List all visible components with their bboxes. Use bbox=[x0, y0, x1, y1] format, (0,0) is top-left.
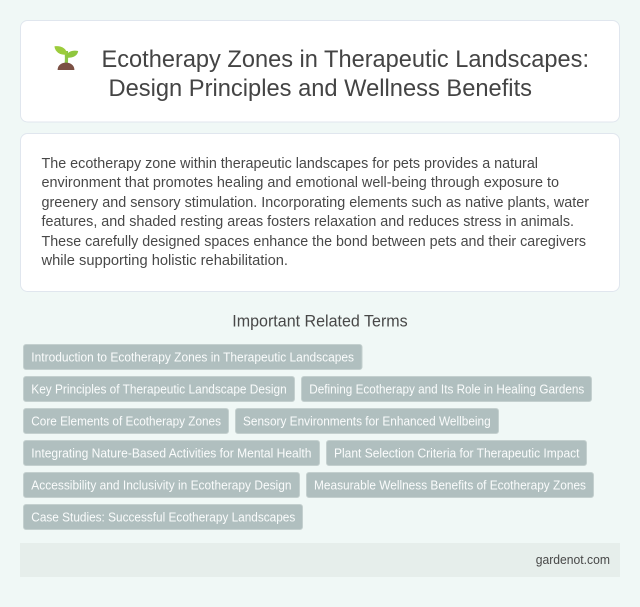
tag bbox=[24, 472, 300, 498]
title: Ecotherapy Zones in Therapeutic Landscapes: bbox=[102, 46, 589, 73]
tag bbox=[236, 408, 498, 434]
tag bbox=[326, 440, 586, 466]
title: Design Principles and Wellness Benefits bbox=[108, 75, 532, 102]
tag: Integrating Nature-Based Activities for Mental Health bbox=[31, 446, 312, 460]
tag bbox=[24, 440, 320, 466]
tag bbox=[24, 504, 302, 530]
tag: Plant Selection Criteria for Therapeutic Impact bbox=[334, 446, 580, 460]
panel: description card bbox=[20, 134, 620, 292]
heading: related terms: Important Related Terms bbox=[232, 313, 408, 331]
tag bbox=[24, 344, 362, 370]
tag list: related terms bbox=[24, 344, 594, 530]
text block: description bbox=[41, 156, 589, 269]
tag bbox=[302, 376, 592, 402]
text block: description: environment that promotes healing and emotional well-being through exposure to bbox=[42, 175, 559, 191]
tag: Sensory Environments for Enhanced Wellbeing bbox=[243, 414, 491, 428]
tag: Key Principles of Therapeutic Landscape Design bbox=[31, 382, 287, 396]
footer source text: gardenot.com bbox=[536, 552, 610, 567]
text block: description: while supporting holistic rehabilitation. bbox=[41, 253, 288, 269]
tag bbox=[306, 472, 594, 498]
footer bbox=[20, 543, 620, 577]
tag: Case Studies: Successful Ecotherapy Landscapes bbox=[31, 510, 295, 524]
tag: Core Elements of Ecotherapy Zones bbox=[31, 414, 221, 428]
tag: Defining Ecotherapy and Its Role in Healing Gardens bbox=[309, 382, 584, 396]
tag: Accessibility and Inclusivity in Ecotherapy Design bbox=[31, 478, 292, 492]
tag bbox=[24, 376, 294, 402]
tag: Measurable Wellness Benefits of Ecotherapy Zones bbox=[314, 478, 586, 492]
icon: sprout bbox=[54, 46, 78, 70]
tag: Introduction to Ecotherapy Zones in Therapeutic Landscapes bbox=[31, 350, 354, 364]
title bbox=[102, 46, 589, 102]
tag bbox=[24, 408, 228, 434]
panel: title card bbox=[20, 20, 620, 122]
text block: description: The ecotherapy zone within therapeutic landscapes for pets provides a natural bbox=[42, 156, 538, 172]
text block: description: These carefully designed spaces enhance the bond between pets and their caregivers bbox=[42, 234, 586, 250]
text block: description: greenery and sensory stimulation. Incorporating elements such as native plants, water bbox=[42, 195, 589, 211]
text block: description: features, and shaded resting areas fosters relaxation and reduces stress in animals. bbox=[42, 214, 574, 230]
